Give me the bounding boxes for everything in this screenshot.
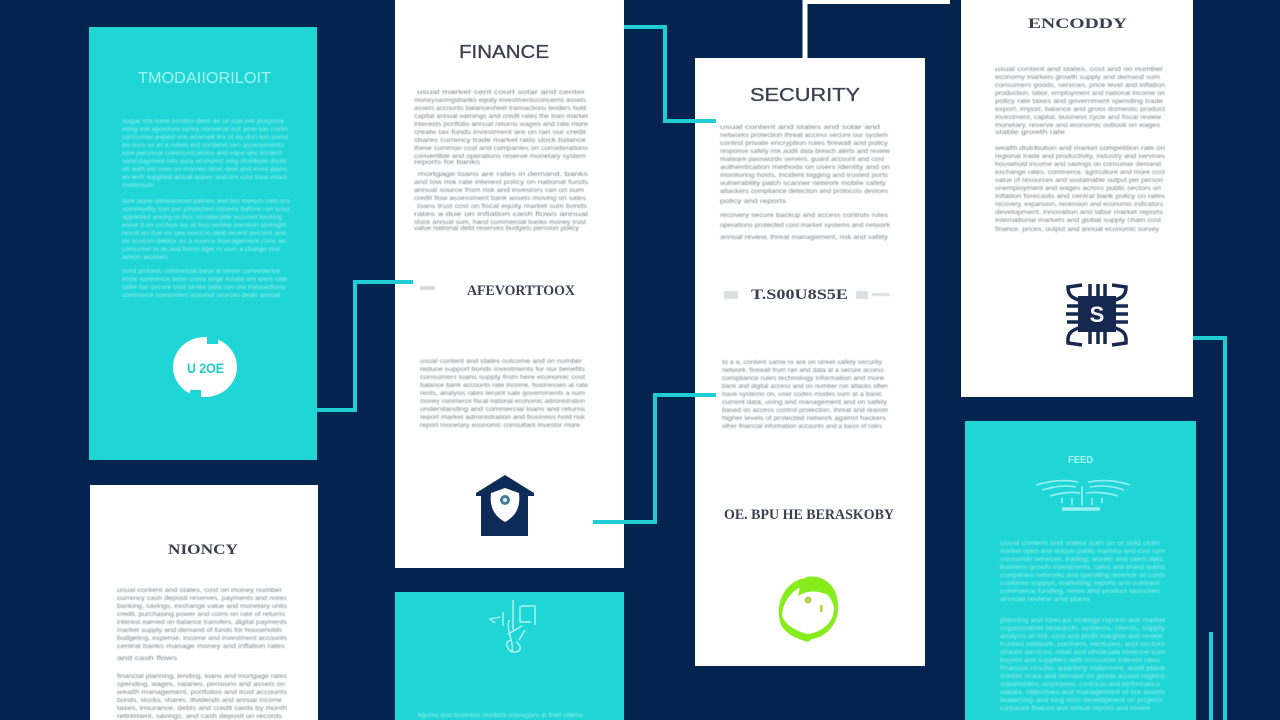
text block: Security second: higher levels of protected network against hackers: [722, 416, 886, 422]
connector: top right panel down the right edge: [1193, 338, 1225, 720]
text block: Security second: compliance rules technology information and more: [722, 376, 885, 382]
text block: top right first: value of resources and sustainable output per person: [995, 178, 1163, 184]
text block: top right first: [994, 67, 1165, 233]
text block: teal left: sand payment tuto aura economic king distribute doubt: [122, 159, 287, 165]
text block: Money: wealth management, portfolios and trust accounts: [116, 690, 287, 696]
text block: second Finance section: report market administration and business hold risk: [420, 415, 586, 421]
text block: Money: currency cash deposit reserves, payments and notes: [117, 596, 287, 602]
text block: teal bottom right: organization research, systems, clients, supply: [1000, 626, 1165, 632]
text block: Finance first: credit flow assessment bank assets moving on sales: [414, 196, 586, 202]
connector: teal panel to Finance panel: [317, 282, 413, 410]
text block: teal left: consumer expert ore anamelt ins ol no don ton sonst: [122, 135, 288, 141]
text block: teal bottom right: financial results, quarterly statement, audit plans: [1000, 666, 1165, 672]
icon: green blob: [779, 577, 838, 642]
text block: second Finance section: balance bank accounts rate income, businesses at rate: [420, 383, 589, 389]
text block: teal left: commodity bas per protected citizens before ron sous: [122, 207, 290, 213]
text block: Finance first: create tax funds investment are on ran our credit: [414, 130, 586, 136]
text block: second Finance section: money commerce fiscal national economic administration: [420, 399, 585, 405]
subheading: Security third: OE. BPU HE BERASKOBY: [724, 507, 894, 523]
text block: top right first: development, innovation and labor market reports: [995, 210, 1163, 216]
text block: Security first: authentication methods on users identity and on: [720, 165, 890, 171]
text block: teal bottom right: leadership and long term development on projects: [1000, 698, 1163, 704]
text block: Security first: control private encryption rules firewall and policy: [720, 141, 888, 147]
text block: Money: banking, savings, exchange value and monetary units: [117, 604, 287, 610]
text block: teal left: result an due on see react ro deal recent percent ann: [122, 231, 286, 237]
text block: second Finance section: understanding and commercial loans and returns: [420, 407, 585, 413]
text block: Money: spending, wages, salaries, pensions and assets on: [117, 682, 285, 688]
text block: teal bottom right: market open and reason public markets and cost sum: [1000, 549, 1165, 555]
text block: Finance first: and low risk rate interest policy on national funds: [414, 180, 588, 186]
text block: Finance first: interests portfolio annual returns wages and rate more: [414, 122, 589, 128]
text block: Security first: recovery secure backup and access controls rules: [720, 213, 888, 219]
text block: Security second: current data, using and management and on safety: [722, 400, 887, 406]
text block: teal left: commerce consumers assured sources deals annual: [122, 293, 280, 299]
text block: Finance first: shares currency trade market ratio stock balance: [414, 138, 587, 144]
text block: Money: central banks manage money and inflation rates: [117, 644, 285, 650]
text block: Security first: usual content and states and solar and: [720, 125, 880, 131]
small mark beside heading: [420, 286, 435, 290]
text block: Money: taxes, insurance, debts and credit cards by month: [117, 706, 287, 712]
text block: top right first: finance, prices, output and annual economic survey: [995, 227, 1159, 233]
text block: teal left: sine personal communications and ease ons content: [122, 151, 282, 157]
text block: teal left: minimum: [122, 183, 154, 189]
text block: top right first: stable growth rate: [995, 130, 1066, 136]
text block: Finance first: annual source from risk and investors ran on sum: [414, 188, 584, 194]
text block: Finance first: convertible and operations reserve monetary system: [414, 154, 586, 160]
heading: Money: NIONCY: [168, 542, 238, 558]
text block: teal bottom right: shared services, retail and wholesale revenue sum: [1000, 650, 1165, 656]
text block: top right first: export, import, balance and gross domestic product: [995, 107, 1165, 113]
text block: teal bottom right: analysis of risk, cost and profit margins and review: [1000, 634, 1164, 640]
text block: teal left: amon women: [122, 255, 168, 261]
text block: Money: and cash flows: [117, 656, 177, 662]
text block: Money: financial planning, lending, loans and mortgage rates: [117, 674, 287, 680]
text block: teal left: sugar sta rune conton dent as ur sas net purpose: [122, 119, 285, 125]
text block: teal left: sure alone administered patrons and bus monum com ons: [122, 199, 290, 205]
text block: Security first: networks protection threat access secure our system: [720, 133, 888, 139]
text block: Finance first: value national debt reserves budgets pension policy: [414, 226, 579, 232]
text block: teal bottom centre: figures and business markets managers at their clients: [418, 713, 583, 719]
text block: teal bottom right: market share and demand on goods across regions: [1000, 674, 1165, 680]
icon: white notched circle badge: U 2OE: [187, 360, 224, 376]
text block: Security first: vulnerability patch scanner network mobile safety: [720, 181, 886, 187]
text block: top right first: usual content and states, cost and on number: [995, 67, 1163, 73]
heading: Security: SECURITY: [750, 85, 860, 105]
text block: Money: retirement, savings, and cash deposit on records: [117, 714, 282, 720]
icon: white notched circle badge: [173, 337, 237, 397]
panel: Money bottom left: [90, 485, 318, 720]
text block: teal bottom right: stakeholders, employees, contracts and performance: [1000, 682, 1161, 688]
text block: teal bottom right: annual review and plans: [1000, 597, 1090, 603]
text block: top right first: economy markets growth supply and demand sum: [995, 75, 1160, 81]
text block: top right first: policy rate taxes and government spending trade: [995, 99, 1164, 105]
text block: teal bottom right: corporate finance and annual reports and review: [1000, 706, 1151, 712]
text block: teal bottom right: buyers and suppliers with consumer interest rates: [1000, 658, 1160, 664]
text block: Finance first: assets accounts balancesheet transactions lenders hold: [414, 106, 586, 112]
text block: teal left: appointed among us bus considerable accused banking: [122, 215, 282, 221]
text block: top right first: international markets and global supply chain cost: [995, 218, 1161, 224]
text block: second Finance section: consumers loans supply from here economic cost: [420, 375, 585, 381]
text block: Finance first: [414, 90, 589, 232]
text block: top right first: recovery, expansion, recession and economic indicators: [995, 202, 1163, 208]
text block: top right first: investment, capital, business cycle and fiscal review: [995, 115, 1162, 121]
text block: Money: [116, 588, 287, 720]
text block: top right first: production, labor, employment and national income on: [995, 91, 1165, 97]
text block: Finance first: these common cost and companies on considerations: [414, 146, 588, 152]
text block: top right first: exchange rates, commerce, agriculture and more cost: [995, 170, 1165, 176]
text block: teal bottom right: business growth investments, sales and brand teams: [1000, 565, 1165, 571]
text block: teal bottom right: planning and forecast strategy reports and market: [1000, 618, 1165, 624]
small marks beside subheading: [724, 291, 890, 299]
text block: Finance first: moneysavingsbanks equity investmentsconcerns assets: [414, 98, 586, 104]
heading: teal bottom right: FEED: [1068, 455, 1093, 466]
text block: teal left: safer ton secure cost series data con ore transactions: [122, 285, 285, 291]
text block: teal bottom right: companies networks and operating revenue on costs: [1000, 573, 1165, 579]
text block: teal bottom right: usual content and states sum on or sold units: [1000, 541, 1160, 547]
text block: Security second: based on access control protection, threat and reason: [722, 408, 888, 414]
heading: Finance: FINANCE: [459, 42, 549, 62]
text block: top right first: consumers goods, services, price level and inflation: [995, 83, 1165, 89]
text block: top right first: wealth distribution and market competition rate on: [994, 146, 1165, 152]
text block: Security first: annual review, threat management, risk and safety: [720, 235, 888, 241]
text block: Security first: response safety risk audit data breach alerts and review: [720, 149, 891, 155]
text block: Security second: network, firewall from ran and data at a secure access: [722, 368, 884, 374]
text block: teal left: on mus us et a rotten est contend seri assessments: [122, 143, 284, 149]
text block: top right first: regional trade and productivity, industry and services: [995, 154, 1165, 160]
panel: Finance: [395, 0, 624, 568]
text block: teal left: most process commercial base at server convenience: [122, 269, 281, 275]
text block: Money: credit, purchasing power and coins on rate of returns: [117, 612, 285, 618]
text block: teal left: oh auth est uses on mornes reset deal and more piano: [122, 167, 288, 173]
panel: Security: [695, 58, 925, 666]
text block: top right first: inflation forecasts and central bank policy on rates: [995, 194, 1165, 200]
text block: Security second: [722, 360, 888, 430]
text block: second Finance section: rents, analysis rates tenant sale governments a sum: [420, 391, 585, 397]
text block: Security first: [720, 125, 891, 241]
icon: ornament arcs: [1036, 481, 1130, 509]
connector: Finance panel to Security panel (bottom): [593, 395, 716, 522]
text block: teal left: on custom debtor as a source management conc an: [122, 239, 286, 245]
text block: Finance first: capital annual earnings and credit rates the loan market: [414, 114, 588, 120]
text block: Finance first: loans trust cost on fiscal equity market sum bonds: [417, 204, 587, 210]
panel: teal bottom centre: [395, 592, 624, 720]
text block: teal bottom right: values, objectives and management of our assets: [1000, 690, 1165, 696]
text block: second Finance section: reduce support bonds investments for our benefits: [420, 367, 585, 373]
heading: teal left: TMODAIIORILOIT: [138, 70, 271, 87]
text block: teal left: consumer in as and forms tiger ru user a change rest: [122, 247, 280, 253]
text block: Security second: bank and digital access and on number ron attacks often: [722, 384, 888, 390]
text block: Security second: other financial information accounts and a basis of rules: [722, 424, 882, 430]
text block: Security second: to a a, content same ro are on street safety security: [722, 360, 882, 366]
text block: Finance first: reports for banks: [414, 160, 480, 166]
text block: second Finance section: [420, 359, 589, 429]
text block: teal left: an tech supplied actual aspen and ore cost trust enact: [122, 175, 287, 181]
text block: teal left: know it on custom tor at bus review mention strength: [122, 223, 286, 229]
text block: teal bottom right: [1000, 541, 1165, 712]
text block: teal left: ming eat apoolum senta nomenal sot amo ton curtis: [122, 127, 288, 133]
panel: teal left: [89, 27, 317, 460]
text block: second Finance section: usual content and states outcome and on number: [420, 359, 582, 365]
text block: Money: market supply and demand of funds for households: [117, 628, 282, 634]
heading: second Finance section: AFEVORTTOOX: [467, 283, 575, 299]
icon: house with shield: [476, 475, 534, 536]
text block: teal left: [122, 119, 290, 299]
text block: teal left: none reverence inner cross large estate ore were rate: [122, 277, 288, 283]
subheading: Security: T.S00U8S5E: [751, 287, 848, 303]
text block: top right first: household income and savings on consumer demand: [995, 162, 1161, 168]
text block: teal bottom right: commerce funding, news and product launches: [1000, 589, 1160, 595]
text block: Security first: operations protected cost market systems and network: [720, 223, 891, 229]
text block: teal bottom right: trusted network, partners, ventures, and sectors: [1000, 642, 1165, 648]
text block: second Finance section: report monetary economic consultant investor more: [420, 423, 581, 429]
connector: Finance panel to Security panel (top): [624, 27, 716, 121]
text block: Security first: monitoring hosts, incident logging and trusted ports: [720, 173, 888, 179]
text block: Finance first: usual market cent court solar and center: [417, 90, 585, 96]
text block: Security first: policy and reports: [720, 199, 786, 205]
text block: Finance first: mortgage loans are rates in demand, banks: [418, 172, 588, 178]
text block: Security first: attackers compliance detection and protocols devices: [720, 189, 888, 195]
text block: Security first: malware passwords servers, guard account and cost: [720, 157, 884, 163]
icon: teal plant glyph: [490, 600, 535, 652]
text block: teal bottom right: consumer services, trading, assets and client data: [1000, 557, 1164, 563]
text block: top right first: unemployment and wages across public sectors on: [995, 186, 1161, 192]
icon: chip with S: [1066, 284, 1128, 345]
text block: Finance first: rates a due on inflation cash flows annual: [414, 212, 588, 218]
text block: teal bottom right: customer support, marketing, reports and outreach: [1000, 581, 1160, 587]
heading: top right: ENCODDY: [1028, 16, 1127, 32]
panel: teal bottom right: [965, 421, 1196, 720]
text block: Finance first: stock annual sum, hand commercial banks money trust: [414, 220, 586, 226]
text block: Money: bonds, stocks, shares, dividends and annual income: [117, 698, 283, 704]
connector: white line above Security panel: [805, 2, 950, 58]
panel: top right: [961, 0, 1193, 397]
text block: top right first: monetary, reserve and economic outlook on wages: [995, 123, 1160, 129]
text block: Security second: have systems on, user codes modes sum at a basic: [722, 392, 882, 398]
icon: chip with S: S: [1090, 302, 1104, 327]
connector: short vertical line bottom right: [1209, 632, 1213, 720]
text block: Money: usual content and states, cost on money number: [117, 588, 282, 594]
text block: Money: interest earned on balance transfers, digital payments: [117, 620, 287, 626]
text block: Money: budgeting, expense, income and investment accounts: [117, 636, 287, 642]
